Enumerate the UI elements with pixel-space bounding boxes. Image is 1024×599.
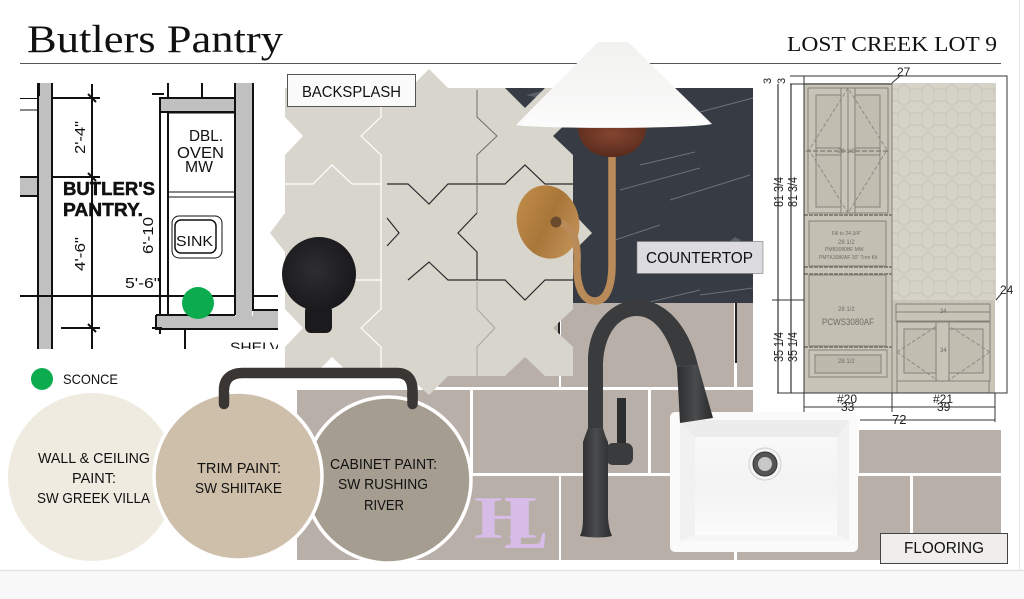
watermark: H <box>474 485 537 551</box>
label: flooring: FLOORING <box>904 540 984 557</box>
floor plan: MW <box>185 159 214 176</box>
paint swatch: trim <box>154 392 322 560</box>
header rule <box>20 62 1001 64</box>
cabinet pull <box>224 373 412 408</box>
dimension labels: 33 <box>841 400 855 414</box>
dimension labels: 24 <box>1000 283 1014 297</box>
cabinet notes: 28 1/2 <box>838 240 855 246</box>
dimension labels: 3 <box>776 78 788 84</box>
watermark <box>474 481 548 565</box>
floor plan: PANTRY. <box>63 200 143 220</box>
paint swatch: wall and ceiling: WALL & CEILING <box>38 450 150 467</box>
paint swatch: trim: TRIM PAINT: <box>197 460 281 477</box>
flooring swatch <box>297 303 1001 560</box>
dimension labels: 35 1/4 <box>771 332 786 362</box>
faucet <box>580 300 713 538</box>
backsplash elevation <box>892 83 996 300</box>
dimension labels: 39 <box>937 400 951 414</box>
paint swatch: cabinet: CABINET PAINT: <box>330 456 437 473</box>
floor plan: SHELV <box>230 339 281 355</box>
knob <box>282 237 356 333</box>
cabinet notes: 34 <box>940 348 947 354</box>
dimension labels: #21 <box>933 392 953 406</box>
cabinet door details <box>804 83 990 393</box>
paint swatch: wall and ceiling: SW GREEK VILLA <box>37 490 150 507</box>
floor plan: 5'-6" <box>125 275 160 292</box>
dimension lines <box>772 76 1007 422</box>
sink <box>670 412 858 552</box>
label: countertop: COUNTERTOP <box>646 250 753 267</box>
cabinet notes: 28 1/2 <box>838 307 855 313</box>
countertop swatch <box>505 88 753 303</box>
sconce legend dot <box>31 368 53 390</box>
cabinet pull ends <box>224 393 412 404</box>
dimension labels: 81 3/4 <box>771 177 786 207</box>
cabinet notes: 34 <box>940 309 947 315</box>
cabinet notes: Fill to 24 3/4" <box>832 231 861 237</box>
floor plan: OVEN <box>177 145 224 162</box>
cabinet notes: PMTK3080AF 30" Trim Kit <box>819 255 878 261</box>
label: backsplash <box>288 74 416 106</box>
paint swatch: cabinet <box>305 397 471 563</box>
cabinet notes: PCWS3080AF <box>822 317 874 327</box>
paint swatch: wall and ceiling <box>8 393 176 561</box>
cabinet notes: 28 1/2 <box>838 359 855 365</box>
label: countertop <box>637 242 763 274</box>
title: Butlers Pantry <box>27 18 284 61</box>
dimension labels: 35 1/4 <box>785 332 800 362</box>
watermark: L <box>504 481 548 565</box>
floor plan: 2'-4" <box>72 121 89 154</box>
cabinet elevation drawing <box>762 65 1014 427</box>
label: backsplash: BACKSPLASH <box>302 84 401 101</box>
cabinet notes: PMB3080BF MW <box>825 247 864 253</box>
label: flooring <box>880 534 1008 564</box>
floor plan <box>20 80 281 355</box>
dimension labels: #20 <box>837 392 857 406</box>
floor plan: BUTLER'S <box>63 179 155 199</box>
paint swatch: trim: SW SHIITAKE <box>195 480 282 497</box>
dimension labels: 27 <box>897 65 911 79</box>
cabinet elevation body <box>804 83 995 393</box>
floor plan: 6'-10 <box>140 217 157 254</box>
dimension labels: 81 3/4 <box>785 177 800 207</box>
dimension labels: 72 <box>892 412 906 427</box>
paint swatch: wall and ceiling: PAINT: <box>72 470 116 487</box>
cabinet notes: 28 1/2 <box>838 149 855 155</box>
dimension labels: 3 <box>762 78 774 84</box>
floor plan: 4'-6" <box>72 237 89 271</box>
dimension labels <box>762 65 1014 427</box>
backsplash swatch <box>270 69 592 395</box>
wall sconce <box>509 42 712 301</box>
floor plan: DBL. <box>189 128 223 145</box>
cabinet notes <box>819 149 947 365</box>
sconce legend label: SCONCE <box>63 371 118 387</box>
paint swatch: cabinet: RIVER <box>364 497 404 514</box>
paint swatch: cabinet: SW RUSHING <box>338 476 428 493</box>
sconce marker on plan <box>182 287 214 319</box>
floor plan: SINK <box>176 233 213 250</box>
project name: LOST CREEK LOT 9 <box>787 32 997 56</box>
